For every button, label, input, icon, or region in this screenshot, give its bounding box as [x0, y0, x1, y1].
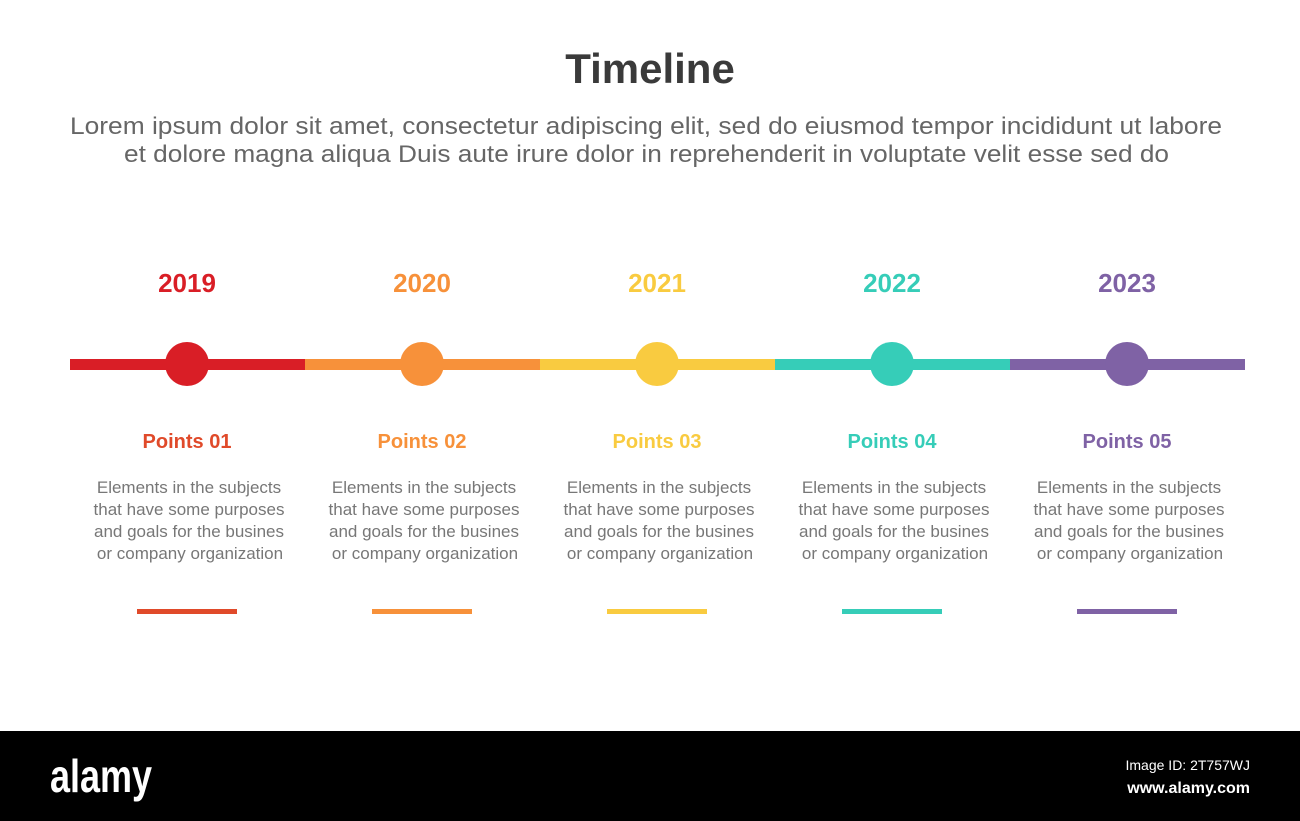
footer bar: alamy: [50, 750, 152, 802]
step 4: 2022: or company organization: [802, 544, 988, 563]
step 3: 2021: 2021: [628, 268, 686, 298]
step 5: 2023: and goals for the busines: [1034, 522, 1224, 541]
step 2: 2020: or company organization: [332, 544, 518, 563]
footer bar: www.alamy.com: [1126, 780, 1250, 797]
step 4: 2022: [799, 268, 989, 614]
step 4: 2022: that have some purposes: [799, 500, 989, 519]
step 5: 2023: 2023: [1098, 268, 1156, 298]
step 2: 2020: Points 02: [378, 431, 466, 453]
step 1: 2019: or company organization: [97, 544, 283, 563]
subtitle: [70, 113, 1222, 168]
step 2: 2020: 2020: [393, 268, 451, 298]
step 5: 2023: Points 05: [1083, 431, 1171, 453]
step 5: 2023: Elements in the subjects: [1037, 478, 1221, 497]
step 2: 2020: Elements in the subjects: [332, 478, 516, 497]
step 4: 2022: Points 04: [848, 431, 937, 453]
step 4: 2022: 2022: [863, 268, 921, 298]
step 1: 2019: Elements in the subjects: [97, 478, 281, 497]
step 2: 2020: [329, 268, 519, 614]
step 4: 2022: Elements in the subjects: [802, 478, 986, 497]
step 5: 2023: that have some purposes: [1034, 500, 1224, 519]
footer bar: Image ID: 2T757WJ: [1126, 757, 1250, 773]
step 3: 2021: that have some purposes: [564, 500, 754, 519]
step 3: 2021: [564, 268, 754, 614]
step 3: 2021: Elements in the subjects: [567, 478, 751, 497]
step 1: 2019: and goals for the busines: [94, 522, 284, 541]
step 1: 2019: [94, 268, 284, 614]
step 2: 2020: and goals for the busines: [329, 522, 519, 541]
footer bar: [0, 731, 1300, 821]
subtitle: et dolore magna aliqua Duis aute irure dolor in reprehenderit in voluptate velit esse sed do: [124, 141, 1169, 168]
step 2: 2020: that have some purposes: [329, 500, 519, 519]
step 1: 2019: 2019: [158, 268, 216, 298]
step 4: 2022: and goals for the busines: [799, 522, 989, 541]
step 1: 2019: Points 01: [143, 431, 231, 453]
step 1: 2019: that have some purposes: [94, 500, 284, 519]
step 3: 2021: and goals for the busines: [564, 522, 754, 541]
step 3: 2021: Points 03: [613, 431, 701, 453]
title: Timeline: [565, 45, 735, 92]
step 5: 2023: or company organization: [1037, 544, 1223, 563]
step 5: 2023: [1034, 268, 1224, 614]
timeline line: [70, 359, 1245, 370]
subtitle: Lorem ipsum dolor sit amet, consectetur adipiscing elit, sed do eiusmod tempor incididunt ut labore: [70, 113, 1222, 140]
step 3: 2021: or company organization: [567, 544, 753, 563]
